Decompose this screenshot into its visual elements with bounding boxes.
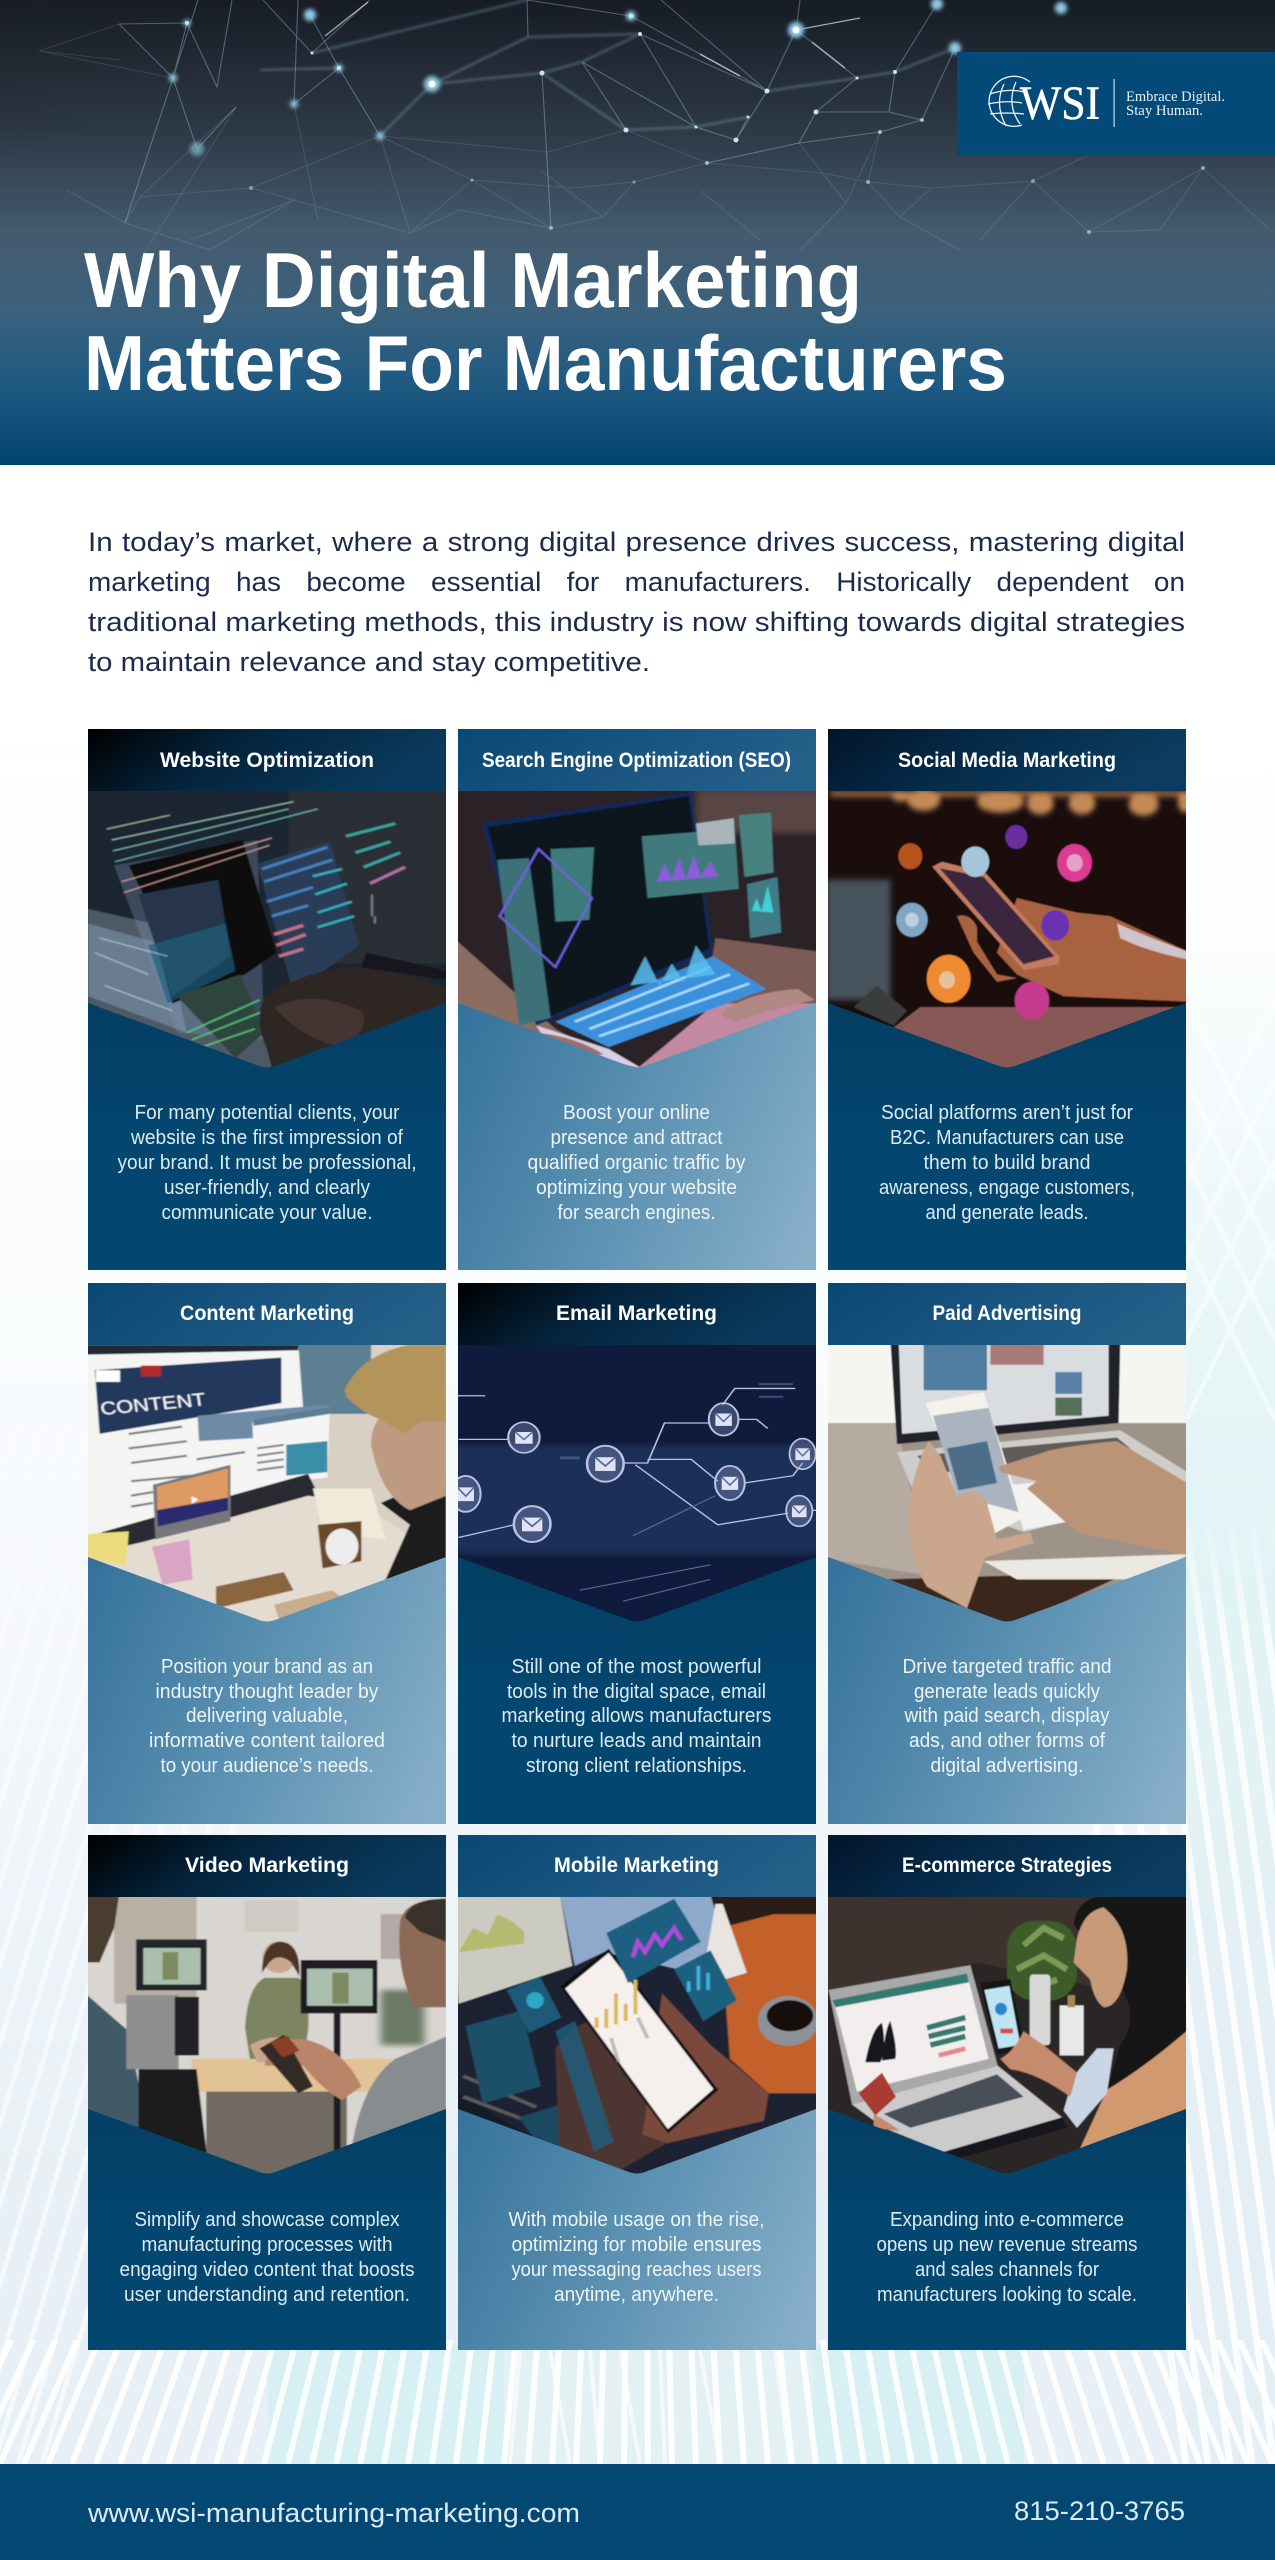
panel: Mobile Marketing (449, 1835, 827, 2350)
body text: industry thought leader by (156, 1681, 378, 1703)
body text: delivering valuable, (186, 1705, 348, 1727)
panel: Video Marketing (80, 1835, 458, 2350)
panel: E-commerce Strategies (820, 1835, 1194, 2350)
body text (149, 1656, 385, 1777)
panel: Paid Advertising (820, 1283, 1194, 1824)
image: code on screens (80, 789, 458, 1076)
intro paragraph: In today’s market, where a strong digital presence drives success, mastering digital (88, 527, 1185, 557)
network: soft thick lines (260, 0, 955, 136)
body text: to your audience’s needs. (160, 1755, 374, 1777)
heading: Social Media Marketing (898, 749, 1116, 772)
body text: your messaging reaches users (512, 2259, 762, 2281)
intro paragraph (88, 527, 1185, 677)
image: woman shopping online (820, 1892, 1194, 2181)
body text: Simplify and showcase complex (134, 2209, 400, 2231)
heading: Website Optimization (160, 749, 374, 772)
title (84, 236, 1007, 407)
body text: tools in the digital space, email (507, 1681, 766, 1703)
heading: E-commerce Strategies (902, 1854, 1112, 1877)
body text: manufacturers looking to scale. (877, 2284, 1137, 2306)
body text (508, 2209, 764, 2306)
panel: Email Marketing (449, 1283, 827, 1824)
logo tagline (1126, 89, 1225, 119)
title: Matters For Manufacturers (84, 319, 1007, 407)
code text lines (107, 802, 405, 924)
logo box (957, 52, 1275, 156)
body text: manufacturing processes with (142, 2234, 392, 2256)
body text: For many potential clients, your (134, 1102, 400, 1124)
image: man reading content on monitor (80, 1339, 458, 1630)
body text: user understanding and retention. (124, 2284, 410, 2306)
logo tagline: Embrace Digital. (1126, 89, 1225, 105)
body text: generate leads quickly (914, 1681, 1100, 1703)
body text: to nurture leads and maintain (512, 1730, 762, 1752)
network: glowing nodes (169, 0, 1205, 234)
body text: for search engines. (558, 1202, 716, 1224)
body text: communicate your value. (162, 1202, 372, 1224)
image: hands using phone by laptop (820, 1339, 1194, 1634)
body text: ads, and other forms of (909, 1730, 1105, 1752)
intro paragraph: to maintain relevance and stay competitive. (88, 647, 650, 677)
body text: optimizing for mobile ensures (512, 2234, 762, 2256)
panel: Social Media Marketing (820, 729, 1194, 1270)
heading: Content Marketing (180, 1302, 354, 1325)
body text: B2C. Manufacturers can use (890, 1127, 1124, 1149)
image: laptop with SEO dashboard (449, 785, 827, 1076)
body text: them to build brand (924, 1152, 1090, 1174)
body text: Position your brand as an (161, 1656, 373, 1678)
title: Why Digital Marketing (84, 236, 862, 324)
page background (0, 1017, 1275, 2464)
panel: Search Engine Optimization (449, 729, 827, 1270)
body text: and generate leads. (926, 1202, 1088, 1224)
body text: Expanding into e-commerce (890, 2209, 1124, 2231)
body text: qualified organic traffic by (528, 1152, 746, 1174)
heading: Email Marketing (556, 1302, 717, 1325)
image: video production set (80, 1892, 458, 2181)
body text (528, 1102, 746, 1224)
panel: Website Optimization (80, 729, 458, 1270)
icon: globe (988, 76, 1030, 126)
body text: engaging video content that boosts (120, 2259, 414, 2281)
body text: Social platforms aren’t just for (881, 1102, 1133, 1124)
body text: optimizing your website (536, 1177, 737, 1199)
image: phone with floating charts (449, 1892, 827, 2181)
body text (118, 1102, 416, 1224)
body text: with paid search, display (904, 1705, 1110, 1727)
panel: Content Marketing (80, 1283, 458, 1824)
phone number: 815-210-3765 (1014, 2496, 1185, 2526)
body text: strong client relationships. (526, 1755, 747, 1777)
body text: awareness, engage customers, (879, 1177, 1135, 1199)
body text: presence and attract (550, 1127, 723, 1149)
body text: Boost your online (563, 1102, 710, 1124)
body text: Still one of the most powerful (512, 1656, 762, 1678)
body text: opens up new revenue streams (876, 2234, 1138, 2256)
header banner (0, 0, 1275, 465)
network: thin lines (119, 0, 955, 228)
body text: With mobile usage on the rise, (508, 2209, 764, 2231)
body text: marketing allows manufacturers (502, 1705, 772, 1727)
footer bar (0, 2464, 1275, 2560)
body text: website is the first impression of (130, 1127, 403, 1149)
logo tagline: Stay Human. (1126, 103, 1203, 119)
body text (902, 1656, 1112, 1777)
body text (876, 2209, 1138, 2306)
image: network of envelopes (449, 1339, 827, 1630)
heading: Video Marketing (185, 1854, 349, 1877)
body text (120, 2209, 414, 2306)
body text: anytime, anywhere. (554, 2284, 719, 2306)
website url: www.wsi-manufacturing-marketing.com (87, 2498, 580, 2528)
intro paragraph: marketing has become essential for manufacturers. Historically dependent on (88, 567, 1185, 597)
body text (879, 1102, 1135, 1224)
body text: digital advertising. (930, 1755, 1084, 1777)
body text: Drive targeted traffic and (902, 1656, 1112, 1678)
heading: Paid Advertising (932, 1302, 1082, 1325)
heading: Search Engine Optimization (SEO) (482, 749, 791, 772)
body text: and sales channels for (915, 2259, 1099, 2281)
intro paragraph: traditional marketing methods, this industry is now shifting towards digital strategies (88, 607, 1185, 637)
body text: your brand. It must be professional, (118, 1152, 416, 1174)
body text (502, 1656, 772, 1777)
heading: Mobile Marketing (554, 1854, 719, 1877)
body text: user-friendly, and clearly (164, 1177, 370, 1199)
logo wordmark: WSI (1020, 77, 1100, 130)
body text: informative content tailored (149, 1730, 385, 1752)
image: hand holding phone with bubbles (820, 785, 1194, 1076)
network: bright highlights (325, 2, 860, 76)
word on the screen: CONTENT (99, 1389, 207, 1419)
network: faint lower lines (39, 24, 1270, 260)
